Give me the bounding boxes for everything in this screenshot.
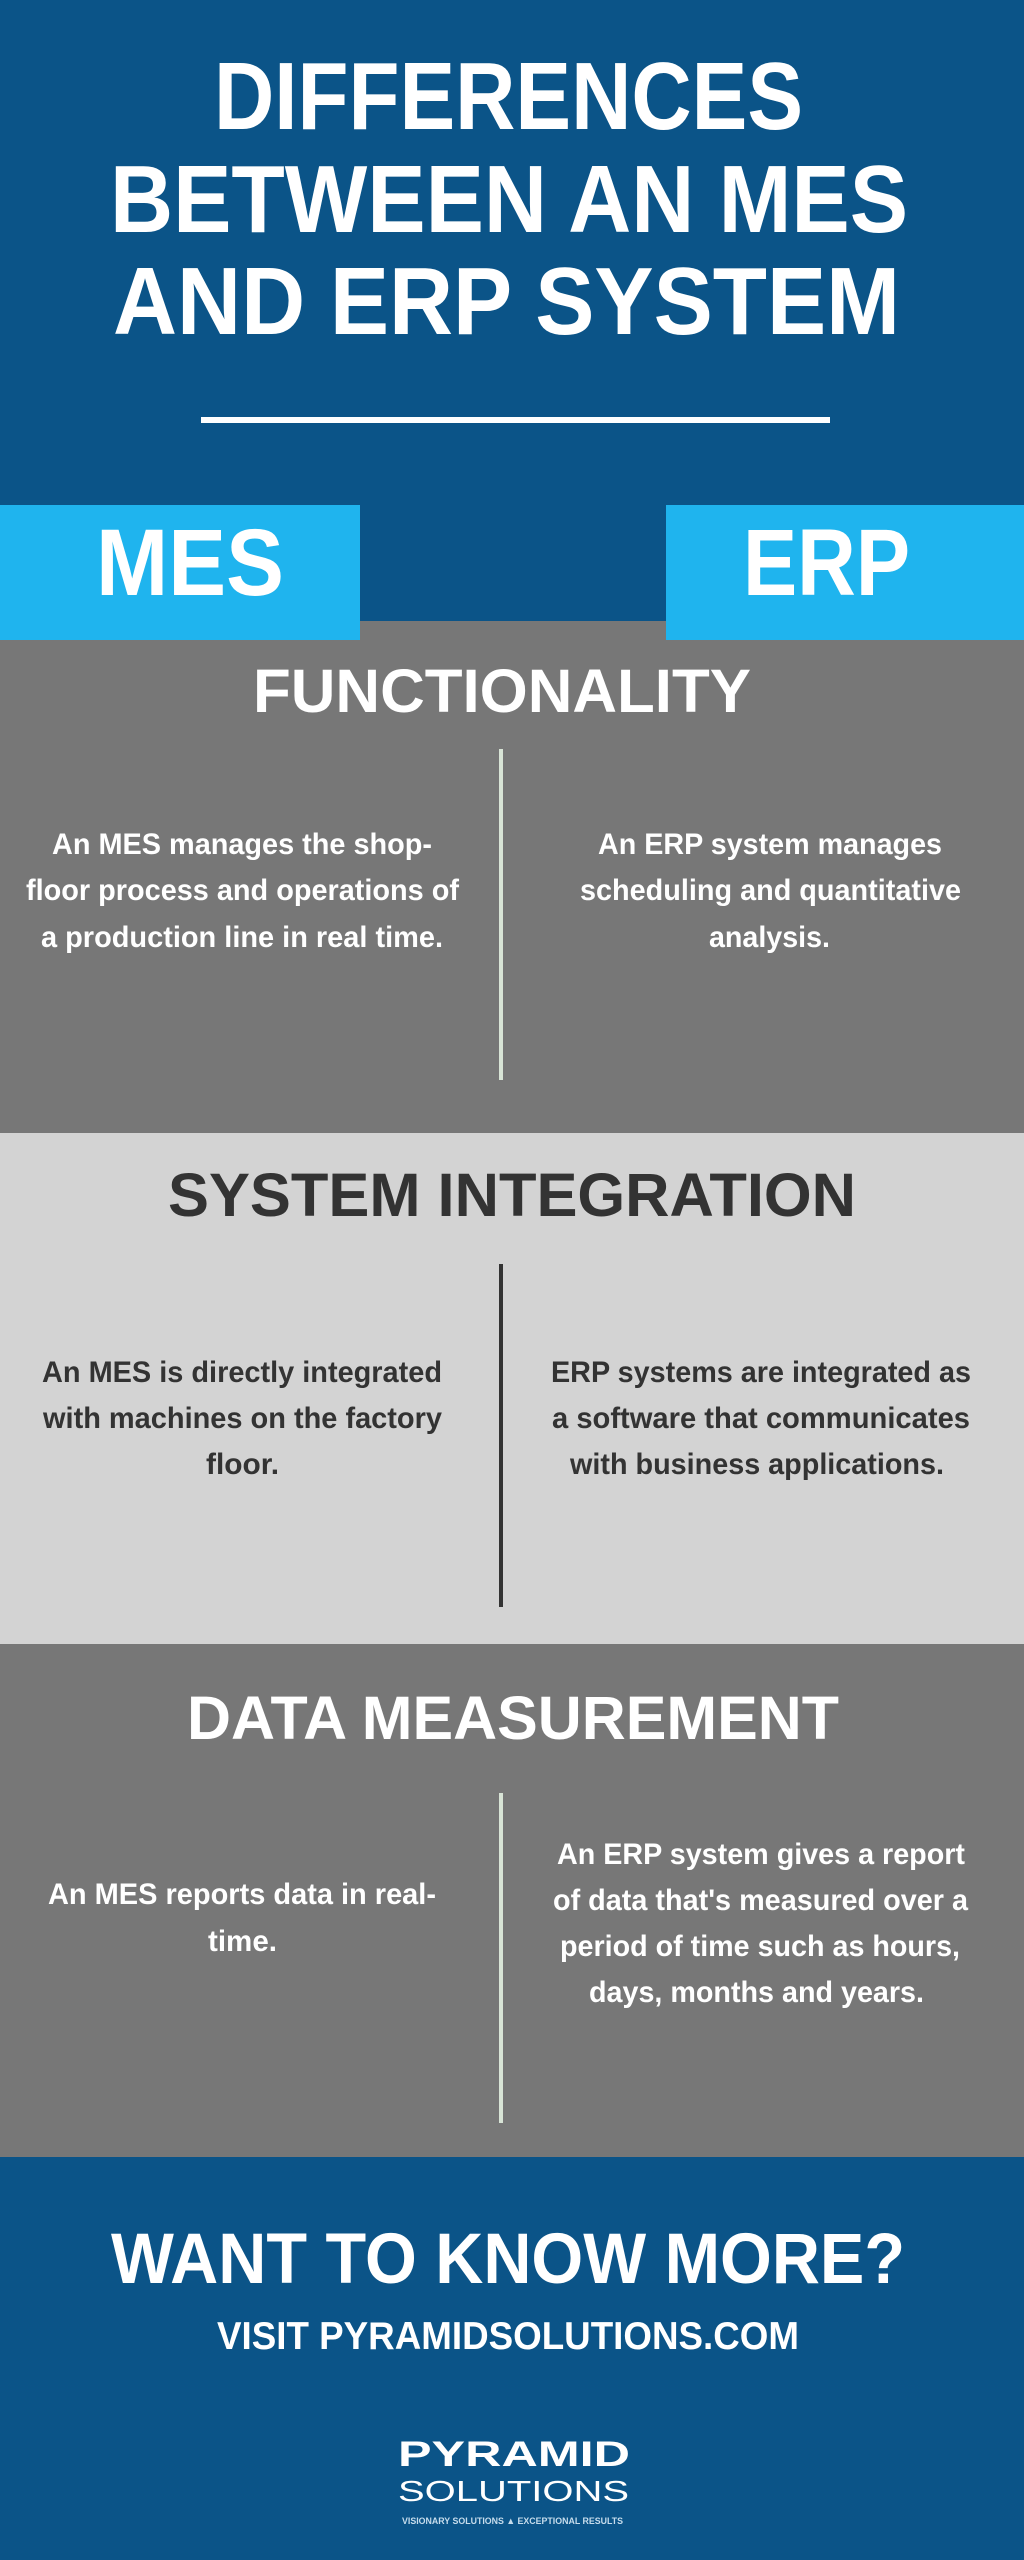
panel: data measurement — [0, 1644, 1024, 2157]
text: MES integration — [42, 1356, 442, 1481]
text: MES integration: floor. — [206, 1448, 279, 1481]
text: ERP data: days, months and years. — [589, 1976, 924, 2009]
text: MES functionality: a production line in real time. — [41, 921, 443, 954]
text: MES integration: An MES is directly integrated — [42, 1356, 442, 1389]
call to action heading: WANT TO KNOW MORE? — [111, 2220, 905, 2299]
text: ERP integration — [551, 1356, 971, 1481]
logo: Pyramid Solutions: VISIONARY SOLUTIONS ▲ EXCEPTIONAL RESULTS — [402, 2516, 623, 2527]
panel: system integration — [0, 1133, 1024, 1644]
logo: Pyramid Solutions: SOLUTIONS — [398, 2476, 629, 2508]
label: ERP — [666, 505, 1024, 640]
text: ERP functionality — [580, 828, 961, 954]
text: ERP integration: ERP systems are integrated as — [551, 1356, 971, 1389]
text: MES functionality — [26, 828, 460, 954]
text: MES data: time. — [208, 1925, 277, 1958]
divider — [499, 1264, 503, 1607]
text: ERP functionality: analysis. — [709, 921, 830, 954]
label: ERP: ERP — [743, 510, 910, 616]
title underline — [201, 417, 830, 423]
divider — [499, 1793, 503, 2123]
text: MES functionality: floor process and operations of — [26, 874, 460, 907]
text: ERP functionality: scheduling and quantitative — [580, 874, 961, 907]
text: MES data: An MES reports data in real- — [48, 1878, 436, 1911]
text: MES integration: with machines on the factory — [42, 1402, 442, 1435]
panel: header — [0, 0, 1024, 621]
text: MES data — [48, 1878, 436, 1958]
title: AND ERP SYSTEM — [113, 248, 900, 355]
call to action link: VISIT PYRAMIDSOLUTIONS.COM — [217, 2315, 799, 2358]
title: BETWEEN AN MES — [110, 146, 908, 253]
panel: functionality — [0, 621, 1024, 1133]
text: ERP integration: a software that communicates — [552, 1402, 970, 1435]
heading: data measurement: DATA MEASUREMENT — [187, 1684, 839, 1752]
title: DIFFERENCES — [214, 43, 803, 150]
label: MES — [0, 505, 360, 640]
heading: system integration: SYSTEM INTEGRATION — [168, 1161, 856, 1229]
panel: footer — [0, 2157, 1024, 2560]
text: ERP integration: with business applications. — [569, 1448, 944, 1481]
label: MES: MES — [96, 510, 284, 616]
text: ERP data: of data that's measured over a — [553, 1884, 968, 1917]
heading: functionality: FUNCTIONALITY — [253, 657, 751, 725]
text: ERP data — [553, 1838, 968, 2009]
text: ERP functionality: An ERP system manages — [598, 828, 942, 861]
text: ERP data: An ERP system gives a report — [557, 1838, 965, 1871]
logo: Pyramid Solutions: PYRAMID — [398, 2435, 630, 2474]
text: ERP data: period of time such as hours, — [560, 1930, 960, 1963]
title — [110, 43, 908, 355]
logo: Pyramid Solutions — [398, 2435, 630, 2527]
divider — [499, 749, 503, 1080]
text: MES functionality: An MES manages the shop- — [52, 828, 432, 861]
